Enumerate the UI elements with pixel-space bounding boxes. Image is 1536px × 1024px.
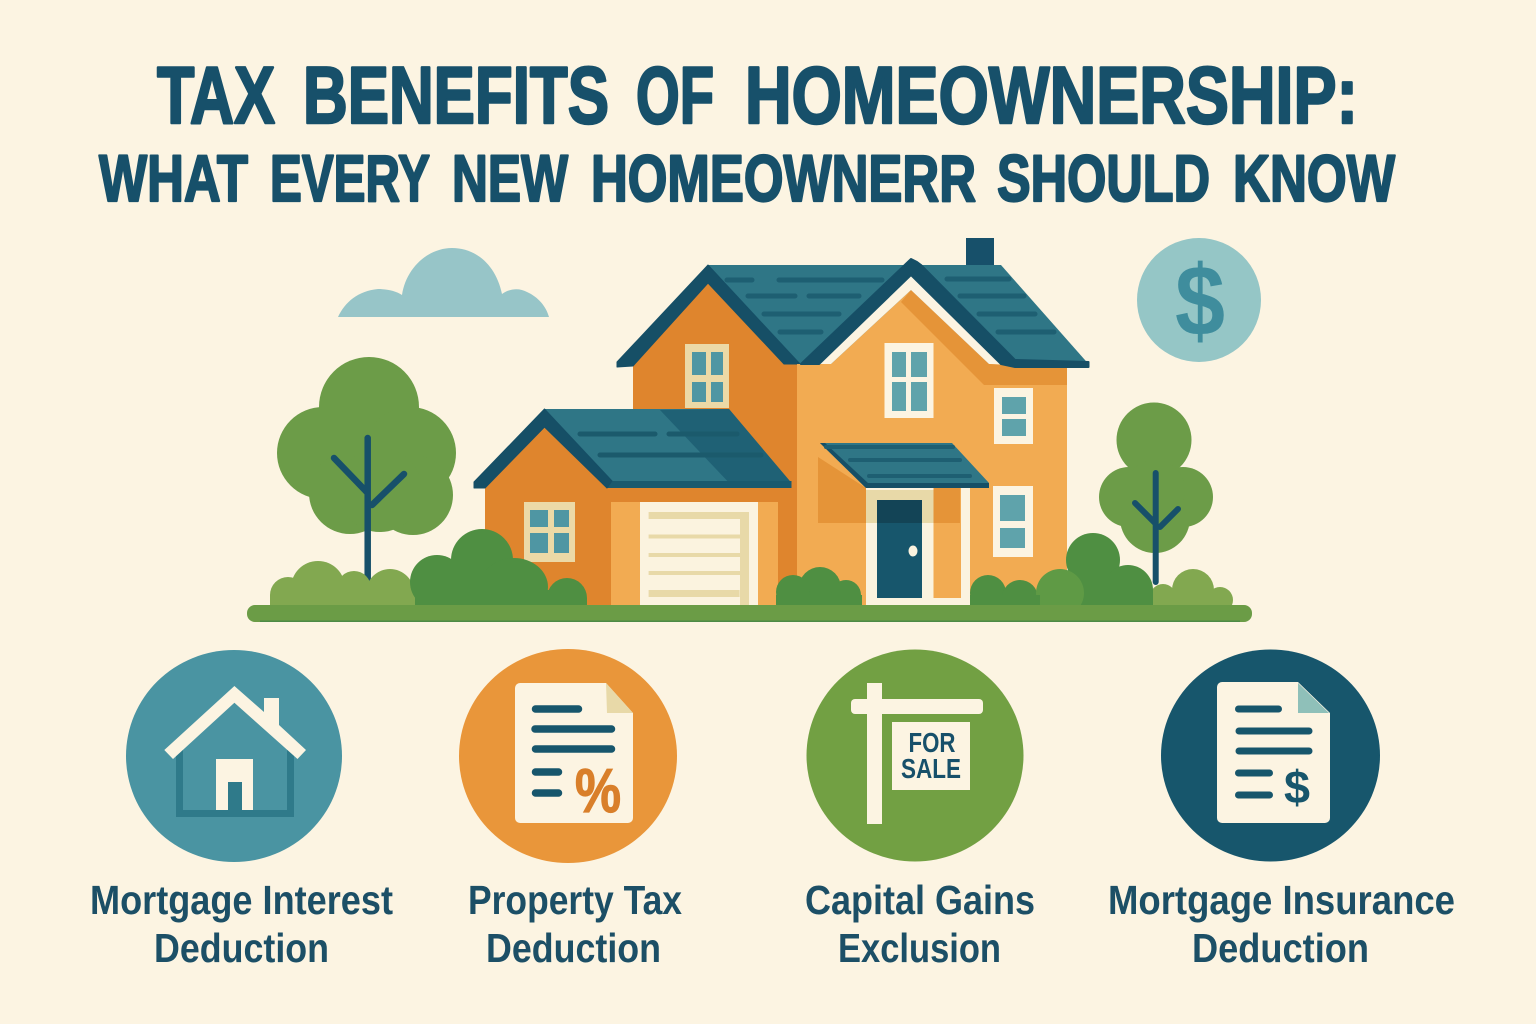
icon: tax document bbox=[459, 649, 677, 863]
title line 2: HOMEOWNERR bbox=[591, 141, 976, 215]
lower right window bbox=[993, 486, 1033, 557]
icon: dollar coin: $ bbox=[1175, 245, 1225, 357]
porch roof bbox=[820, 443, 989, 488]
house bbox=[474, 238, 1088, 605]
title line 1: BENEFITS bbox=[303, 51, 609, 141]
title line 1: HOMEOWNERSHIP: bbox=[745, 51, 1358, 141]
garage door bbox=[640, 502, 758, 605]
upper roof shingles bbox=[727, 279, 1054, 332]
icon: tax document: % bbox=[575, 757, 621, 826]
lower left wall bbox=[485, 427, 611, 605]
title line 2: SHOULD bbox=[997, 141, 1210, 215]
center bush bbox=[776, 567, 862, 610]
label: Capital Gains bbox=[805, 877, 1035, 923]
bushes light left bbox=[270, 561, 418, 617]
label bbox=[468, 877, 682, 971]
tree left bbox=[277, 357, 456, 605]
label bbox=[805, 877, 1035, 971]
lower roof bbox=[474, 409, 792, 488]
icon: cloud bbox=[338, 248, 549, 317]
right gable roof edge bbox=[801, 259, 1088, 367]
lower left window bbox=[524, 502, 575, 562]
upper right window bbox=[884, 343, 934, 418]
front door bbox=[877, 500, 922, 598]
tree right bbox=[1099, 402, 1213, 582]
right bushes bbox=[970, 533, 1153, 617]
chimney bbox=[966, 238, 994, 268]
main wall bbox=[797, 290, 1067, 605]
label: Deduction bbox=[486, 925, 661, 971]
icon: for sale sign bbox=[806, 650, 1024, 862]
title line 1: TAX bbox=[157, 51, 275, 141]
icon: for sale sign: SALE bbox=[901, 753, 961, 784]
bushes light right bbox=[1150, 569, 1233, 613]
benefit 3: capital gains bbox=[805, 650, 1035, 971]
door frame bbox=[866, 488, 981, 605]
title line 2: EVERY bbox=[270, 141, 430, 215]
title line 2: KNOW bbox=[1233, 141, 1396, 215]
title bbox=[99, 51, 1396, 215]
title line 1 bbox=[157, 51, 1358, 141]
label: Mortgage Insurance bbox=[1108, 877, 1455, 923]
ground bbox=[247, 605, 1252, 622]
benefit 2: property tax bbox=[459, 649, 682, 971]
upper left wall bbox=[633, 283, 797, 605]
label: Mortgage Interest bbox=[90, 877, 393, 923]
title line 1: OF bbox=[636, 51, 714, 141]
title line 2: NEW bbox=[452, 141, 569, 215]
garage wall bbox=[611, 488, 797, 605]
upper left gable trim bbox=[617, 265, 800, 367]
small right window bbox=[994, 388, 1033, 444]
garage bush bbox=[410, 529, 587, 618]
label: Deduction bbox=[1192, 925, 1369, 971]
upper roof bbox=[708, 265, 1088, 364]
gable shadow bbox=[901, 290, 1067, 385]
label bbox=[90, 877, 393, 971]
title line 2 bbox=[99, 141, 1396, 215]
label: Exclusion bbox=[838, 925, 1001, 971]
bushes dark bbox=[410, 529, 1153, 618]
porch shadow bbox=[818, 457, 960, 523]
icon: insurance document: $ bbox=[1284, 761, 1310, 813]
white gable trim bbox=[819, 275, 1001, 364]
icon: insurance document bbox=[1161, 650, 1380, 862]
upper left window bbox=[685, 344, 729, 408]
label: Property Tax bbox=[468, 877, 682, 923]
label bbox=[1108, 877, 1455, 971]
icon: for sale sign: FOR bbox=[908, 727, 956, 758]
benefit 1: mortgage interest bbox=[90, 650, 393, 971]
icon: dollar coin bbox=[1137, 238, 1261, 362]
benefit 4: mortgage insurance bbox=[1108, 650, 1455, 971]
label: Deduction bbox=[154, 925, 329, 971]
title line 2: WHAT bbox=[99, 141, 248, 215]
icon: house circle bbox=[126, 650, 342, 862]
